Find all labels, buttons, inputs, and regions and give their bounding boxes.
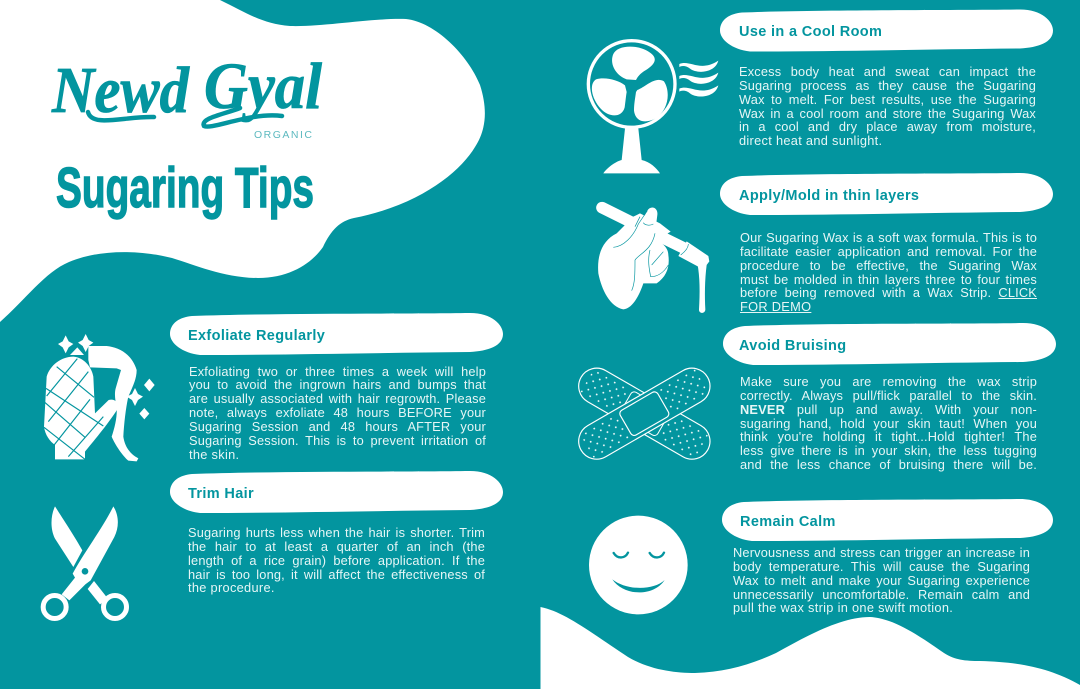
body text: remain calm: unnecessarily uncomfortable. Remain calm and	[733, 587, 1030, 602]
body text: avoid bruising: Make sure you are removing the wax strip	[740, 374, 1037, 389]
body text: exfoliate regularly: Exfoliating two or three times a week will help	[189, 364, 486, 378]
body text: avoid bruising: sugaring hand, hold your skin taut! When you	[740, 416, 1037, 431]
heading pill: remain calm: Remain Calm	[740, 514, 836, 530]
body text: apply/mold in thin layers	[740, 230, 1037, 314]
logo	[51, 50, 323, 141]
logo: Gyal	[204, 50, 323, 123]
logo: Newd	[51, 54, 190, 127]
body text: remain calm: Wax to melt and make your Sugaring experience	[733, 573, 1030, 588]
icon: calm smiling face	[589, 516, 688, 614]
icon: scissors	[40, 506, 129, 621]
body text: exfoliate regularly: the skin.	[189, 447, 239, 462]
panel: exfoliate regularly	[44, 313, 503, 462]
body text: apply/mold in thin layers: must be molded in thin layers three to four times	[740, 272, 1037, 287]
body text: exfoliate regularly: are usually associated with hair regrowth. Please	[189, 391, 486, 406]
heading pill: remain calm	[722, 499, 1053, 541]
icon: crossed bandages	[578, 368, 711, 460]
heading pill: trim hair: Trim Hair	[188, 486, 254, 502]
body text: exfoliate regularly: note, always exfoliate 48 hours BEFORE your	[189, 405, 486, 420]
body text: avoid bruising: less give there is in your skin, the less tugging	[740, 443, 1037, 458]
body text: avoid bruising: and the less chance of bruising there will be.	[740, 457, 1037, 472]
heading pill: exfoliate regularly: Exfoliate Regularly	[188, 328, 325, 344]
body text: apply/mold in thin layers: FOR DEMO	[740, 299, 811, 314]
body text: remain calm: Nervousness and stress can trigger an increase in	[733, 545, 1030, 560]
panel: avoid bruising	[578, 323, 1056, 472]
icon: exfoliating mitt and leg	[44, 334, 155, 462]
panel: use in a cool room	[586, 10, 1053, 541]
panel: apply/mold in thin layers	[596, 173, 1053, 314]
body text: exfoliate regularly: Sugaring Session and 48 hours AFTER your	[189, 419, 486, 434]
body text: apply/mold in thin layers: before being removed with a Wax Strip. CLICK	[740, 285, 1037, 300]
body text: remain calm: pull the wax strip in one swift motion.	[733, 600, 953, 615]
body text: trim hair: length of a rice grain) before application. If the	[188, 553, 485, 568]
body text: use in a cool room: Wax to melt. For best results, use the Sugaring	[739, 92, 1036, 107]
body text: avoid bruising: correctly. Always pull/flick parallel to the skin.	[740, 388, 1037, 403]
icon: fan	[586, 39, 718, 174]
icon: hand holding wax stick	[596, 202, 710, 313]
heading pill: avoid bruising	[723, 323, 1056, 365]
heading pill: use in a cool room: Use in a Cool Room	[739, 24, 882, 40]
body text: remain calm: body temperature. This will cause the Sugaring	[733, 559, 1030, 574]
panel: remain calm	[589, 499, 1053, 615]
body text: avoid bruising: NEVER pull up and away. With your non-	[740, 402, 1037, 417]
body text: apply/mold in thin layers: procedure to be effective, the Sugaring Wax	[740, 258, 1037, 273]
body text: trim hair: hair is too long, it will affect the effectiveness of	[188, 567, 485, 582]
body text: use in a cool room: Sugaring process as they cause the Sugaring	[739, 78, 1036, 93]
body text: use in a cool room: Wax in a cool room and store the Sugaring Wax	[739, 106, 1036, 121]
body text: avoid bruising: think you're holding it tight...Hold tighter! The	[740, 429, 1037, 444]
title: Sugaring Tips	[56, 156, 314, 220]
body text: trim hair: the procedure.	[188, 580, 275, 595]
body text: use in a cool room: direct heat and sunlight.	[739, 133, 882, 148]
body text: remain calm	[733, 545, 1030, 615]
body text: use in a cool room: Excess body heat and sweat can impact the	[739, 64, 1036, 79]
heading pill: trim hair	[170, 471, 503, 513]
body text: avoid bruising	[740, 374, 1037, 472]
heading pill: apply/mold in thin layers: Apply/Mold in thin layers	[739, 188, 919, 204]
body text: exfoliate regularly: you to avoid the ingrown hairs and bumps that	[189, 377, 486, 392]
body text: trim hair	[188, 525, 485, 595]
body text: apply/mold in thin layers: Our Sugaring Wax is a soft wax formula. This is to	[740, 230, 1037, 245]
body text: use in a cool room: in a cool and dry place away from moisture,	[739, 119, 1036, 134]
heading pill: use in a cool room	[720, 10, 1053, 52]
heading pill: apply/mold in thin layers	[720, 173, 1053, 215]
heading pill: exfoliate regularly	[170, 313, 503, 355]
body text: trim hair: the hair to at least a quarter of an inch (the	[188, 539, 485, 554]
body text: apply/mold in thin layers: facilitate easier application and removal. For the	[740, 244, 1037, 259]
body text: exfoliate regularly	[189, 364, 486, 462]
body text: exfoliate regularly: Sugaring Session. This is to prevent irritation of	[189, 433, 486, 448]
panel: trim hair	[40, 471, 503, 621]
body text: use in a cool room	[739, 64, 1036, 148]
body text: trim hair: Sugaring hurts less when the hair is shorter. Trim	[188, 525, 485, 540]
logo: ORGANIC	[254, 129, 312, 141]
heading pill: avoid bruising: Avoid Bruising	[739, 338, 846, 354]
